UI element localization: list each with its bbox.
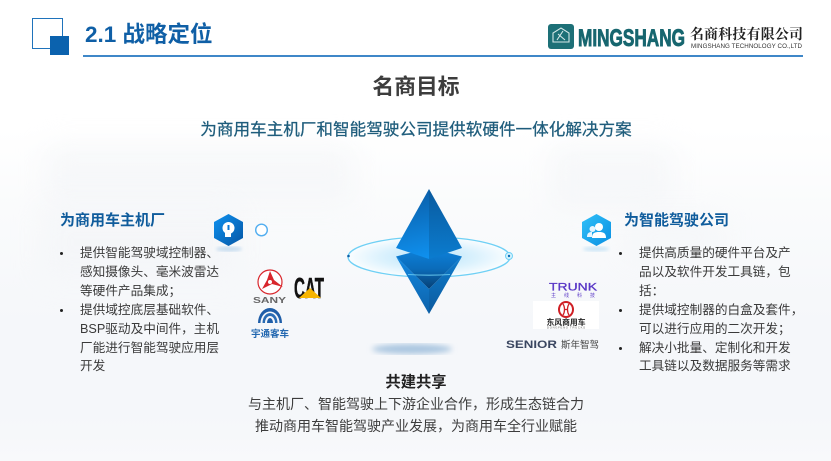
logo: Dongfeng: DONGFENG TRUCKS xyxy=(547,326,585,330)
conclusion body xyxy=(248,396,584,434)
shadow under crystal xyxy=(372,344,452,354)
bullet list: 括： xyxy=(639,284,664,298)
conclusion body: 推动商用车智能驾驶产业发展，为商用车全行业赋能 xyxy=(255,418,577,434)
subtitle: 为商用车主机厂和智能驾驶公司提供软硬件一体化解决方案 xyxy=(200,120,632,139)
company logo xyxy=(548,24,803,52)
bullet list: BSP驱动及中间件，主机 xyxy=(80,322,219,336)
conclusion body: 与主机厂、智能驾驶上下游企业合作，形成生态链合力 xyxy=(248,396,584,412)
conclusion text xyxy=(248,374,584,434)
logo: CAT: CAT xyxy=(294,273,324,305)
icon: hex idea xyxy=(214,214,243,252)
panel: autonomous driving companies xyxy=(619,212,803,373)
logo: Dongfeng: 东风商用车 xyxy=(546,317,586,327)
logo: Yutong: 宇通客车 xyxy=(251,328,289,340)
panel: OEM xyxy=(60,212,219,373)
panel heading: 为商用车主机厂 xyxy=(60,212,165,229)
company name: 名商科技有限公司 xyxy=(690,26,803,43)
conclusion heading: 共建共享 xyxy=(385,374,447,391)
logo: Senior: 斯年智驾 xyxy=(561,339,599,351)
bullet list: 感知摄像头、毫米波雷达 xyxy=(80,265,219,279)
bullet list: 提供智能驾驶域控制器、 xyxy=(80,246,219,260)
logo: Senior: SENIOR xyxy=(506,339,557,351)
logo: Dongfeng xyxy=(533,301,599,330)
bullet list: 厂能进行智能驾驶应用层 xyxy=(80,341,219,355)
bullet list: 可以进行应用的二次开发； xyxy=(639,322,791,336)
bullet list xyxy=(619,246,803,373)
bullet list: 提供高质量的硬件平台及产 xyxy=(639,246,791,260)
bullet list: 提供域控制器的白盒及套件， xyxy=(639,303,803,317)
logo: CAT xyxy=(294,273,324,305)
logo: TRUNK: TRUNK xyxy=(549,282,598,294)
logo: TRUNK xyxy=(549,282,598,299)
bullet list xyxy=(60,246,219,373)
company english name: MINGSHANG TECHNOLOGY CO.,LTD xyxy=(691,43,803,50)
bullet list: 解决小批量、定制化和开发 xyxy=(639,341,791,355)
logo mark xyxy=(548,24,574,49)
logo: TRUNK: 主线科技 xyxy=(551,292,595,299)
header rule xyxy=(83,55,803,57)
crystal xyxy=(396,189,462,314)
bullet list: 等硬件产品集成； xyxy=(80,284,181,298)
heading: 2.1 战略定位 xyxy=(85,22,213,47)
logo: SANY: SANY xyxy=(253,295,286,305)
logo: Senior xyxy=(506,339,599,351)
bullet list: 提供域控底层基础软件、 xyxy=(80,303,219,317)
header icon: overlapping squares xyxy=(32,18,69,55)
logo: Yutong xyxy=(251,308,289,340)
bullet list: 品以及软件开发工具链，包 xyxy=(639,265,791,279)
small ring xyxy=(256,224,267,236)
icon: hex users xyxy=(582,214,611,252)
logo: SANY xyxy=(253,270,286,305)
bullet list: 工具链以及数据服务等需求 xyxy=(639,359,791,373)
panel heading: 为智能驾驶公司 xyxy=(624,212,729,229)
main title: 名商目标 xyxy=(372,74,460,99)
bullet list: 开发 xyxy=(80,359,105,373)
logo wordmark: MINGSHANG xyxy=(578,25,685,52)
orbit ring xyxy=(347,237,512,277)
